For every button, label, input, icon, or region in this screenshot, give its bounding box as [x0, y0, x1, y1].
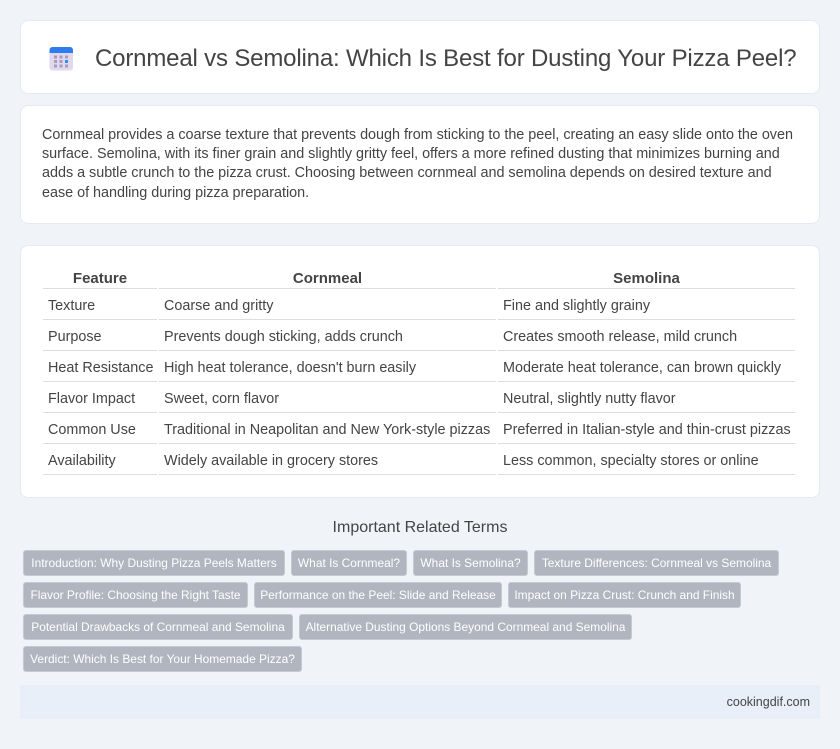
- flavor cornmeal: [159, 382, 496, 413]
- text line 4: ease of handling during pizza preparation.: [42, 185, 309, 201]
- row: purpose: [43, 320, 157, 351]
- purpose semolina: [498, 320, 795, 351]
- tag: [413, 550, 528, 576]
- row: heat resistance: [43, 351, 157, 382]
- heat semolina: Moderate heat tolerance, can brown quickly: [503, 360, 781, 376]
- tag: [23, 646, 302, 672]
- text line 3: adds a subtle crunch to the pizza crust. Choosing between cornmeal and semolina depends on desired texture and: [42, 165, 772, 181]
- tag: Verdict: Which Is Best for Your Homemade Pizza?: [30, 652, 295, 666]
- panel: comparison table: [20, 245, 820, 498]
- tag: Texture Differences: Cornmeal vs Semolina: [542, 556, 771, 570]
- tag: [291, 550, 407, 576]
- title: Cornmeal vs Semolina: Which Is Best for Dusting Your Pizza Peel?: [95, 45, 796, 72]
- row: texture: Texture: [48, 298, 95, 314]
- purpose semolina: Creates smooth release, mild crunch: [503, 329, 737, 345]
- tag: Potential Drawbacks of Cornmeal and Semolina: [31, 620, 285, 634]
- row: flavor impact: Flavor Impact: [48, 391, 135, 407]
- availability semolina: Less common, specialty stores or online: [503, 453, 759, 469]
- texture semolina: [498, 289, 795, 320]
- tag: [254, 582, 502, 608]
- row: common use: [43, 413, 157, 444]
- row: purpose: Purpose: [48, 329, 102, 345]
- use semolina: [498, 413, 795, 444]
- row: common use: Common Use: [48, 422, 136, 438]
- tag: [534, 550, 779, 576]
- tag: [23, 582, 248, 608]
- flavor cornmeal: Sweet, corn flavor: [164, 391, 279, 407]
- heat cornmeal: High heat tolerance, doesn't burn easily: [164, 360, 416, 376]
- table header: cornmeal: Cornmeal: [293, 270, 362, 287]
- tag: Alternative Dusting Options Beyond Cornmeal and Semolina: [306, 620, 625, 634]
- tag: [299, 614, 632, 640]
- related terms tags: [23, 550, 779, 672]
- heading: related terms: Important Related Terms: [333, 519, 507, 536]
- table header: semolina: [498, 269, 795, 289]
- availability semolina: [498, 444, 795, 475]
- tag: Impact on Pizza Crust: Crunch and Finish: [514, 588, 735, 602]
- panel: introduction text: [20, 105, 820, 224]
- tag: What Is Semolina?: [420, 556, 521, 570]
- text line 2: surface. Semolina, with its finer grain and slightly gritty feel, offers a more refined dusting that minimizes burning and: [42, 146, 780, 162]
- table header: semolina: Semolina: [613, 270, 680, 287]
- tag: What Is Cornmeal?: [298, 556, 400, 570]
- flavor semolina: [498, 382, 795, 413]
- row: heat resistance: Heat Resistance: [48, 360, 153, 376]
- footer bar: [20, 685, 820, 719]
- heat cornmeal: [159, 351, 496, 382]
- flavor semolina: Neutral, slightly nutty flavor: [503, 391, 676, 407]
- text line 1: Cornmeal provides a coarse texture that prevents dough from sticking to the peel, creating an easy slide onto the oven: [42, 127, 793, 143]
- panel: title header: [20, 20, 820, 94]
- tag: [508, 582, 741, 608]
- texture semolina: Fine and slightly grainy: [503, 298, 650, 314]
- row: availability: [43, 444, 157, 475]
- texture cornmeal: Coarse and gritty: [164, 298, 273, 314]
- texture cornmeal: [159, 289, 496, 320]
- row: texture: [43, 289, 157, 320]
- availability cornmeal: Widely available in grocery stores: [164, 453, 378, 469]
- heat semolina: [498, 351, 795, 382]
- tag: Introduction: Why Dusting Pizza Peels Matters: [31, 556, 277, 570]
- purpose cornmeal: Prevents dough sticking, adds crunch: [164, 329, 403, 345]
- purpose cornmeal: [159, 320, 496, 351]
- row: flavor impact: [43, 382, 157, 413]
- table header: feature: [43, 269, 157, 289]
- icon: calendar: [50, 47, 73, 70]
- tag: [23, 614, 293, 640]
- table header: feature: Feature: [73, 270, 127, 287]
- use cornmeal: [159, 413, 496, 444]
- tag: Performance on the Peel: Slide and Release: [260, 588, 496, 602]
- table header: cornmeal: [159, 269, 496, 289]
- tag: [23, 550, 285, 576]
- availability cornmeal: [159, 444, 496, 475]
- footer source: cookingdif.com: [727, 695, 810, 709]
- use cornmeal: Traditional in Neapolitan and New York-style pizzas: [164, 422, 490, 438]
- row: availability: Availability: [48, 453, 116, 469]
- use semolina: Preferred in Italian-style and thin-crust pizzas: [503, 422, 791, 438]
- tag: Flavor Profile: Choosing the Right Taste: [30, 588, 241, 602]
